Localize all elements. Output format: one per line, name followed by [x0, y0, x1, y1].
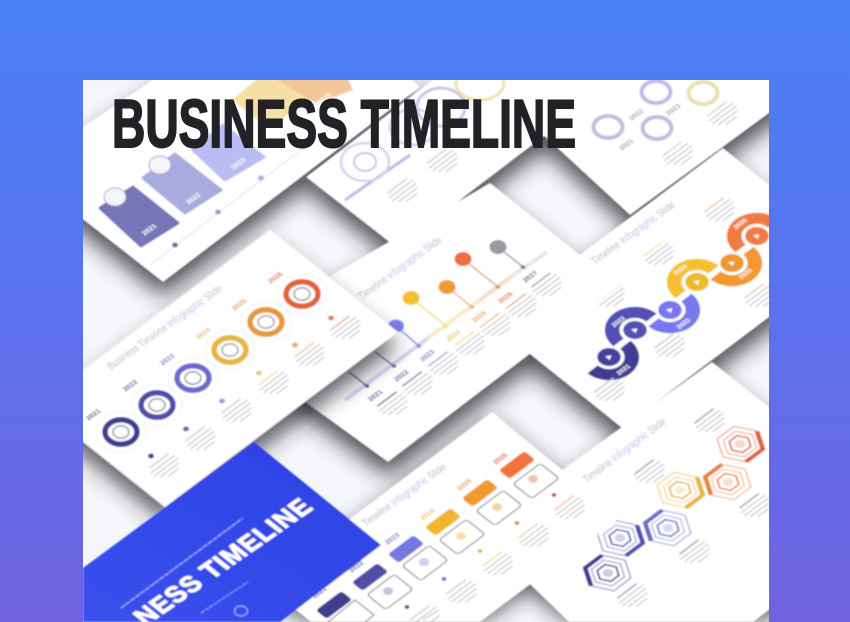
swirl years: 2025 [737, 267, 755, 281]
tag years: 2026 [492, 452, 510, 466]
swirl 2026 [726, 212, 769, 253]
ring 2023 [417, 88, 465, 126]
swirl years: 2023 [675, 317, 693, 331]
card icons [104, 156, 171, 206]
cover play icon [234, 606, 248, 616]
swirl years: 2026 [732, 217, 750, 231]
slide title: Business Timeline Infographic Slide [105, 283, 225, 372]
card years: 2021 [141, 223, 159, 237]
ring years: 2023 [159, 353, 177, 367]
swirl years [610, 217, 755, 377]
ring text blocks [147, 314, 366, 481]
ring 2021 [105, 420, 137, 444]
hexagon 2022 [589, 514, 651, 562]
years [618, 103, 683, 152]
pin 2026 [454, 252, 498, 287]
card 2025 [276, 80, 354, 104]
base line [345, 155, 410, 200]
pin 2024 [402, 291, 446, 326]
cover caption [201, 582, 248, 613]
ring halos [96, 274, 327, 452]
card years: 2022 [185, 192, 203, 206]
card years: 2023 [230, 157, 248, 171]
text blocks [662, 101, 738, 166]
cover subtitle [121, 518, 243, 608]
card years [141, 92, 334, 237]
ring 2023 [177, 366, 209, 390]
pin years: 2022 [393, 369, 411, 383]
text blocks [592, 196, 780, 405]
hexagon 2023 [637, 504, 699, 552]
box icons [383, 475, 538, 595]
card 2023 [193, 125, 264, 180]
tag years: 2025 [456, 478, 474, 492]
ring years: 2022 [122, 379, 140, 393]
ring 2022 [141, 393, 173, 417]
tag years: 2022 [348, 560, 366, 574]
slide: hexagon timeline [476, 362, 800, 622]
slide C shadow [37, 244, 398, 521]
hexagon text blocks [615, 407, 775, 611]
timeline base line [150, 128, 330, 265]
ring years [85, 271, 285, 422]
pin 2027 [490, 240, 523, 267]
pin years: 2026 [497, 291, 515, 305]
slide: circle timeline top centre [306, 80, 545, 242]
slide: tag timeline [263, 412, 620, 622]
pin 2021 stem [349, 372, 367, 386]
ring 2026 [286, 282, 318, 306]
collage image [83, 80, 769, 622]
ring 2023 [642, 117, 672, 139]
timeline markers [172, 176, 264, 248]
pin years: 2025 [471, 310, 489, 324]
hexagon 2024 [649, 466, 711, 514]
tag years: 2021 [311, 586, 329, 600]
ring years: 2021 [85, 408, 103, 422]
text blocks [386, 148, 458, 202]
ring years: 2025 [231, 298, 249, 312]
pin 2023 [388, 320, 419, 346]
tag years [311, 452, 510, 600]
slide: swirl timeline [529, 147, 769, 428]
tag dots [405, 493, 556, 609]
pin 2022 stem [375, 352, 394, 366]
pin years: 2021 [367, 389, 385, 403]
main title: BUSINESS TIMELINE [112, 86, 576, 162]
swirl 2021 [587, 340, 640, 382]
slide: hexagon cards top left [83, 80, 420, 282]
pin base dots [365, 265, 525, 388]
ring 2024 [688, 82, 718, 104]
slide title: Timeline Infographic Slide [589, 200, 678, 267]
coloured tags [316, 451, 535, 619]
pin years: 2027 [522, 270, 540, 284]
ring 2025 [250, 310, 282, 334]
pin years [367, 270, 540, 403]
swirl years: 2024 [672, 263, 690, 277]
ring dots [148, 316, 334, 458]
ring years: 2026 [267, 271, 285, 285]
ring 2021 [341, 143, 389, 181]
ring years: 2024 [195, 327, 213, 341]
slide title: Timeline Infographic Slide [581, 416, 669, 485]
outline boxes [328, 463, 559, 622]
ring 2022 [642, 81, 670, 103]
pin text blocks [375, 271, 567, 419]
pin 2025 [438, 280, 472, 307]
hexagon 2026 [709, 420, 771, 468]
card 2024 [232, 80, 310, 128]
tag years: 2023 [384, 532, 402, 546]
tag years: 2024 [419, 508, 437, 522]
ring 2024 [214, 338, 246, 362]
slide: business timeline rings [37, 230, 398, 507]
pin years: 2023 [419, 349, 437, 363]
swirl years: 2021 [615, 363, 633, 377]
ring 2024 [454, 80, 506, 102]
hexagon 2025 [697, 458, 759, 506]
years: 2021 [618, 138, 636, 152]
ring 2021 [594, 116, 622, 138]
card years: 2025 [316, 92, 334, 106]
slide title: Timeline Infographic Slide [360, 462, 449, 529]
pin years: 2024 [445, 329, 463, 343]
slide: blue cover [83, 442, 381, 622]
timeline band [345, 252, 547, 400]
tag text blocks [410, 494, 590, 622]
slide title: Timeline Infographic Slide [356, 235, 445, 302]
swirl 2024 [666, 258, 719, 299]
card 2021 [100, 187, 178, 246]
swirl years: 2022 [610, 315, 628, 329]
slide: rings top right [544, 80, 769, 216]
slide: pin timeline [305, 182, 619, 463]
swirl 2025 [710, 246, 764, 288]
card 2022 [143, 154, 221, 213]
hexagon 2021 [577, 549, 639, 597]
years: 2023 [665, 103, 683, 117]
swirl 2022 [604, 306, 657, 347]
years: 2022 [628, 108, 646, 122]
swirl 2023 [648, 293, 701, 334]
ring 2022 [390, 109, 436, 145]
slide shadows [83, 80, 769, 622]
